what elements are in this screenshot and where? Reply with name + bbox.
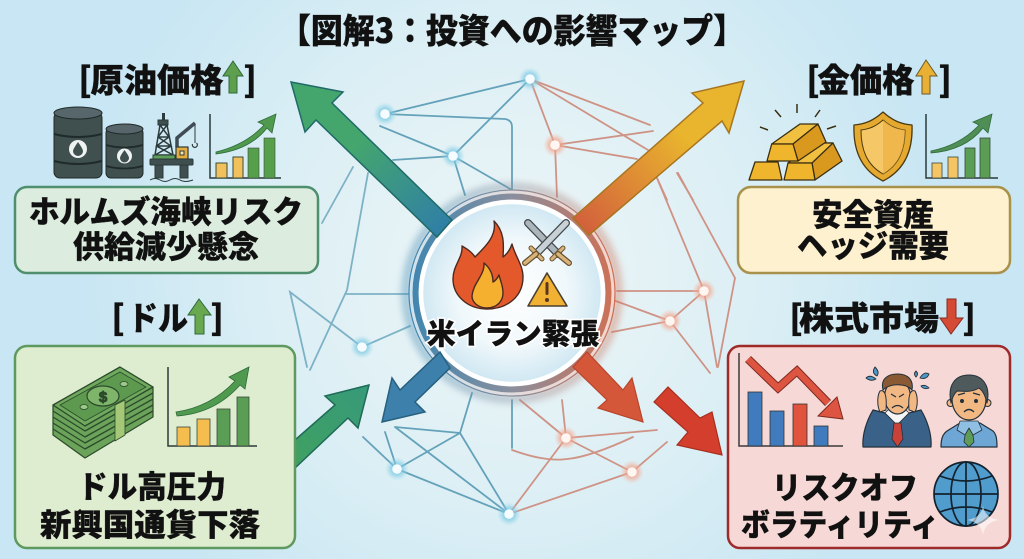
heading: stock market <box>789 291 976 340</box>
heading: gold: ] <box>938 53 952 102</box>
heading: stock market: 株式市場 <box>799 292 939 340</box>
callout: hormuz risk: 供給減少懸念 <box>73 222 259 267</box>
callout: hormuz risk: ホルムズ海峡リスク <box>29 187 303 232</box>
icon: flame <box>453 221 523 309</box>
title: 【図解3：投資への影響マップ】 <box>279 4 745 53</box>
hub label: 米イラン緊張 <box>427 311 599 353</box>
panel: gold <box>738 53 1010 273</box>
heading: dollar: [ <box>111 291 125 340</box>
icon: offshore rig <box>150 113 197 182</box>
icon: banknote stack <box>53 367 153 458</box>
panel: stock market <box>728 291 1010 548</box>
text: dollar pressure: ドル高圧力 <box>78 462 226 507</box>
heading: stock market: [ <box>789 291 803 340</box>
heading: gold: [ <box>806 53 820 102</box>
icon: worried investor with head in hands <box>863 367 931 447</box>
heading: gold: 金価格 <box>818 54 914 102</box>
text: dollar pressure: 新興国通貨下落 <box>40 500 260 545</box>
icon: gold bars <box>749 104 842 180</box>
chart: stocks falling <box>739 353 843 446</box>
callout: safe asset: 安全資産 <box>812 190 934 235</box>
callout: safe asset: ヘッジ需要 <box>797 221 949 266</box>
callout: safe asset <box>738 187 1010 273</box>
icon: oil barrels <box>54 107 143 178</box>
arrow: to gold <box>573 81 744 235</box>
text: risk off volatility: リスクオフ <box>772 463 918 508</box>
panel: dollar <box>15 291 295 548</box>
arrow: red towards stock panel <box>654 387 722 455</box>
text: dollar pressure <box>40 462 260 545</box>
heading: crude oil: ] <box>243 53 257 102</box>
heading: dollar: ドル <box>128 292 188 340</box>
heading: crude oil: [ <box>78 53 92 102</box>
red network lines <box>509 79 735 514</box>
heading: dollar <box>111 291 224 340</box>
blue network lines <box>290 79 530 514</box>
icon: banknote stack: $ <box>99 389 108 406</box>
central hub: 米イラン緊張 <box>406 187 618 399</box>
icon: crossed swords <box>525 223 569 263</box>
chart: oil rising <box>210 114 281 178</box>
icon: sparkle watermark <box>967 506 999 535</box>
hub label: 米イラン緊張 <box>427 311 599 353</box>
arrow: from dollar panel <box>295 385 369 468</box>
callout: hormuz risk <box>15 187 318 273</box>
network of connected nodes <box>290 67 735 526</box>
heading: gold <box>806 53 952 102</box>
icon: anxious investor <box>941 375 997 447</box>
icon: globe <box>934 462 998 526</box>
chart: dollar rising <box>168 367 257 446</box>
text: risk off volatility: ボラティリティ <box>741 500 939 545</box>
panel: crude oil <box>15 53 318 273</box>
heading: crude oil: 原油価格 <box>90 54 224 102</box>
icon: warning triangle <box>528 273 567 306</box>
heading: dollar: ] <box>210 291 224 340</box>
arrow: to dollar <box>382 352 450 422</box>
icon: shield <box>854 112 912 181</box>
chart: gold rising <box>926 114 998 178</box>
arrow: to stock market <box>573 352 643 422</box>
heading: stock market: ] <box>962 291 976 340</box>
network nodes <box>350 67 716 526</box>
text: risk off volatility <box>741 463 939 545</box>
arrow: to crude oil <box>291 82 452 237</box>
